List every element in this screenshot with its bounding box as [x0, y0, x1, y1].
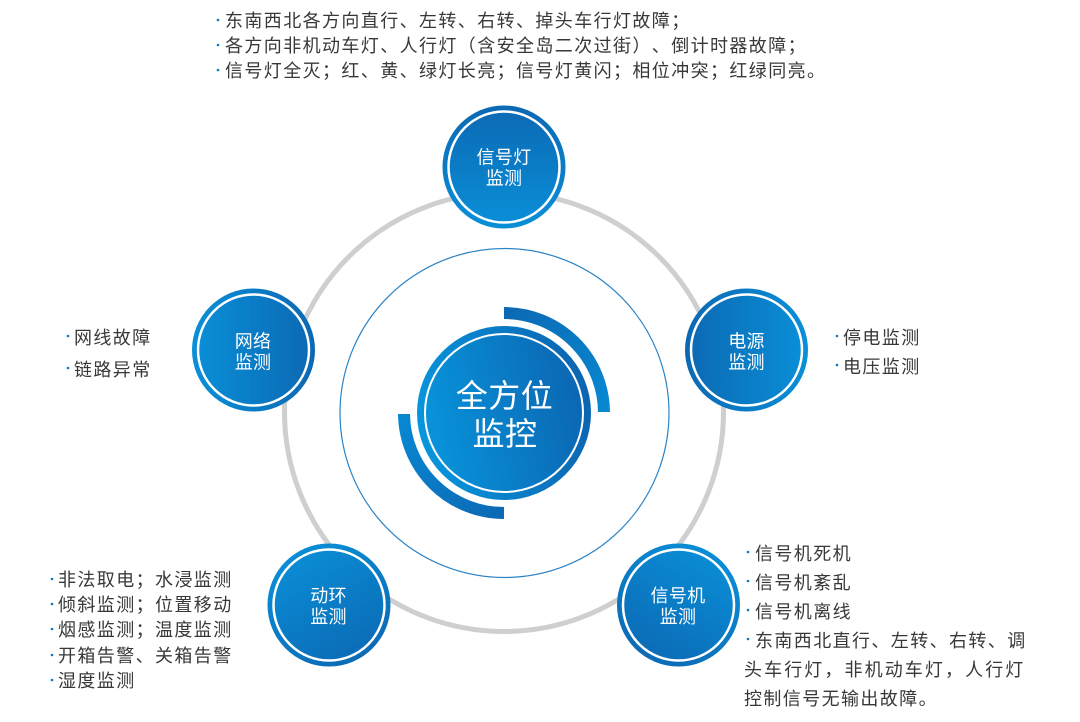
text block: signal controller faults — [744, 544, 1027, 709]
text block: environment monitoring: 倾斜监测；位置移动 — [58, 595, 233, 615]
text block: signal controller faults: 头车行灯，非机动车灯，人行灯 — [744, 660, 1025, 680]
text block: signal light faults — [217, 11, 826, 81]
text block: signal controller faults: 信号机死机 — [755, 544, 852, 564]
text block: power monitoring: 停电监测 — [843, 328, 921, 348]
text block: signal light faults: 各方向非机动车灯、人行灯（含安全岛二次过街）、倒计时器故障； — [225, 36, 807, 56]
center hub: 全方位监控 — [404, 313, 604, 513]
node: 信号灯监测 — [442, 106, 566, 228]
node: 信号机监测: 监测 — [660, 607, 696, 627]
thin blue inner ring — [340, 248, 669, 578]
text block: environment monitoring: 非法取电；水浸监测 — [58, 570, 233, 590]
text block: signal controller faults: 东南西北直行、左转、右转、调 — [755, 631, 1027, 651]
node: 电源监测 — [685, 288, 808, 412]
large gray orbit ring — [284, 192, 724, 632]
node: 信号灯监测: 信号灯 — [477, 148, 531, 168]
text block: power monitoring: 电压监测 — [843, 357, 921, 377]
node: 信号机监测 — [617, 544, 740, 666]
node: 电源监测: 电源 — [728, 332, 765, 352]
node: 网络监测 — [192, 288, 315, 412]
text block: network faults — [67, 328, 152, 380]
center title: 全方位 — [456, 378, 553, 414]
node: 网络监测: 监测 — [235, 352, 271, 372]
center white ring — [425, 334, 583, 492]
center circle — [417, 326, 591, 500]
arc: lower left — [404, 414, 504, 513]
arc: upper right — [504, 313, 604, 412]
text block: environment monitoring: 烟感监测；温度监测 — [58, 620, 233, 640]
node: 动环监测 — [268, 544, 390, 666]
text block: signal controller faults: 控制信号无输出故障。 — [744, 689, 938, 709]
text block: signal light faults: 东南西北各方向直行、左转、右转、掉头车行灯故障； — [225, 11, 691, 31]
node: 信号机监测: 信号机 — [651, 586, 705, 606]
text block: signal controller faults: 信号机紊乱 — [755, 573, 852, 593]
node: 动环监测: 动环 — [310, 586, 347, 606]
node: 电源监测: 监测 — [728, 352, 765, 372]
text block: environment monitoring: 湿度监测 — [58, 671, 136, 691]
text block: power monitoring — [836, 328, 921, 377]
center title: 监控 — [472, 416, 538, 452]
text block: environment monitoring — [51, 570, 233, 691]
text block: environment monitoring: 开箱告警、关箱告警 — [58, 646, 233, 666]
text block: signal controller faults: 信号机离线 — [755, 602, 852, 622]
node: 网络监测: 网络 — [235, 332, 271, 352]
node: 动环监测: 监测 — [310, 607, 347, 627]
text block: network faults: 网线故障 — [74, 328, 152, 348]
text block: network faults: 链路异常 — [74, 360, 152, 380]
node: 信号灯监测: 监测 — [486, 168, 522, 188]
text block: signal light faults: 信号灯全灭；红、黄、绿灯长亮；信号灯黄闪；相位冲突；红绿同亮。 — [225, 61, 826, 81]
